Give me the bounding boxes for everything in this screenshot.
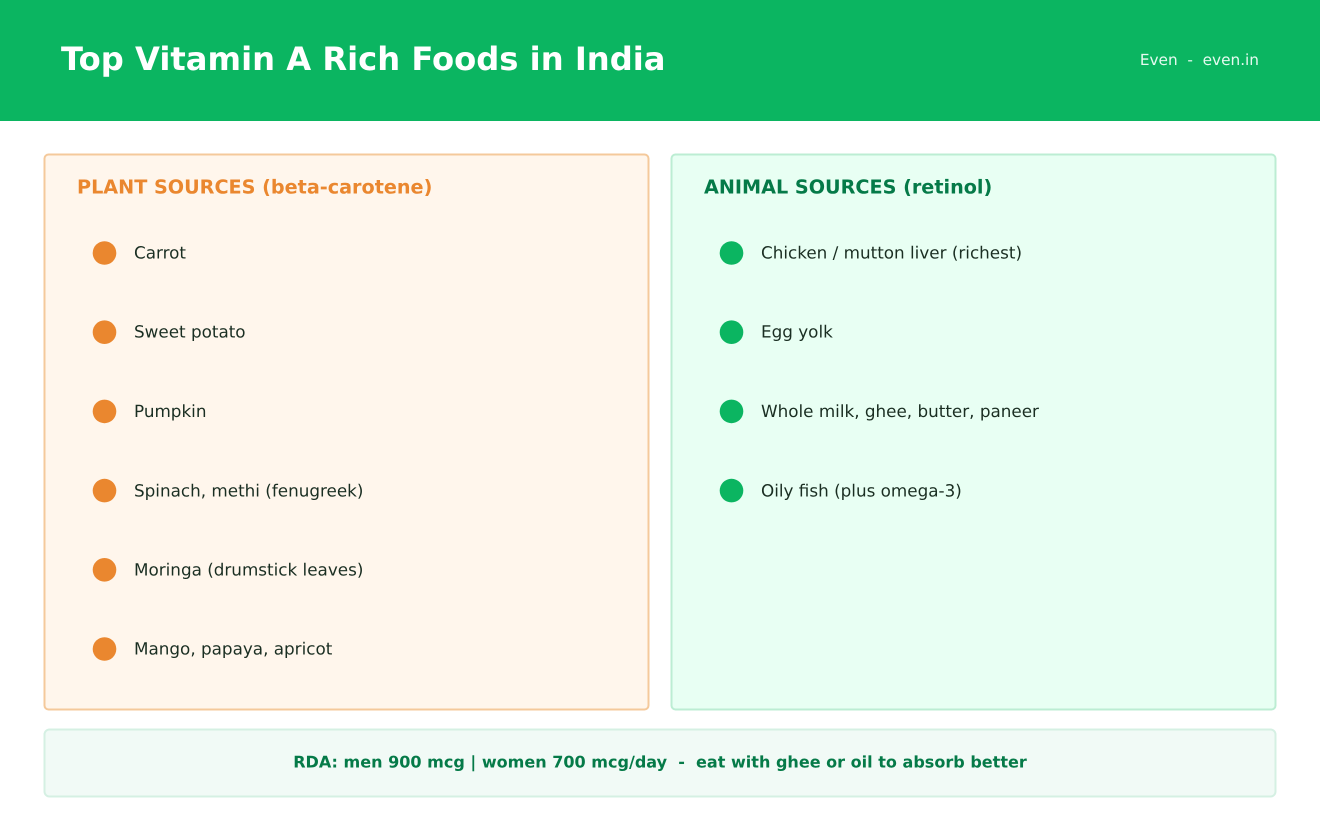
source credit: Even - even.in: [1140, 51, 1259, 69]
item: sweet potato: Sweet potato: [134, 322, 246, 342]
item: egg yolk: [720, 320, 833, 344]
plant heading: PLANT SOURCES (beta-carotene): [77, 175, 432, 198]
item: carrot: [93, 241, 186, 265]
panel: plant sources: [44, 154, 648, 710]
item: carrot: Carrot: [134, 242, 186, 262]
header banner: [0, 0, 1320, 121]
item: pumpkin: [93, 400, 206, 423]
item: pumpkin: Pumpkin: [134, 401, 206, 421]
RDA text: RDA: men 900 mcg | women 700 mcg/day - eat with ghee or oil to absorb better: [293, 753, 1027, 772]
title: Top Vitamin A Rich Foods in India: [61, 40, 666, 78]
item: moringa: Moringa (drumstick leaves): [134, 559, 363, 579]
item: oily fish: Oily fish (plus omega-3): [761, 480, 962, 500]
item: mango, papaya, apricot: Mango, papaya, apricot: [134, 638, 333, 658]
item: spinach, methi: Spinach, methi (fenugreek): [134, 480, 363, 500]
item: sweet potato: [93, 320, 246, 344]
item: liver: Chicken / mutton liver (richest): [761, 242, 1022, 262]
RDA callout: [44, 730, 1276, 796]
item: dairy: Whole milk, ghee, butter, paneer: [761, 401, 1039, 421]
panel: animal sources: [672, 154, 1276, 710]
animal heading: ANIMAL SOURCES (retinol): [704, 175, 992, 198]
item: egg yolk: Egg yolk: [761, 322, 833, 342]
